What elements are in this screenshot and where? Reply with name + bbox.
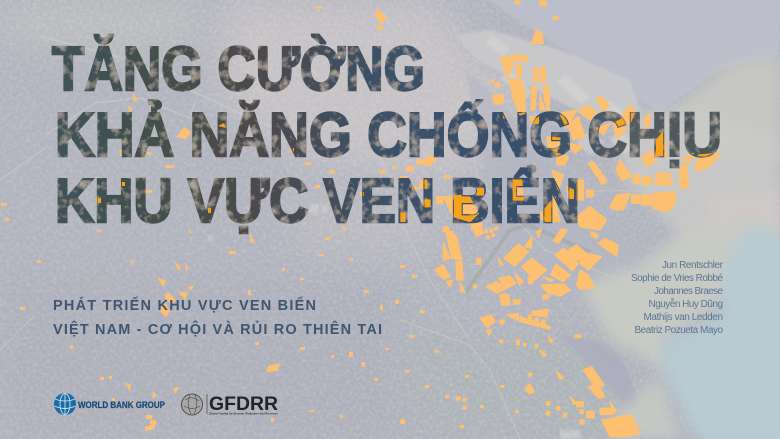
logo: GFDRR: [182, 394, 278, 416]
authors: Johannes Braese: [654, 286, 723, 297]
icon: seal: [182, 394, 202, 415]
logo: GFDRR: Global Facility for Disaster Reduction and Recovery: [209, 412, 278, 416]
saturated parcels seen through the title letters: [98, 113, 713, 222]
built-up land along the river bank: [455, 30, 640, 122]
logo: GFDRR: GFDRR: [209, 394, 278, 415]
authors: Nguyễn Huy Dũng: [648, 297, 723, 310]
title: KHU VỰC VEN BIỂN: [55, 167, 580, 236]
subtitle: VIỆT NAM - CƠ HỘI VÀ RỦI RO THIÊN TAI: [53, 320, 382, 338]
authors: [631, 260, 724, 336]
authors: Mathijs van Ledden: [644, 312, 723, 323]
river and bay water: [490, 0, 780, 110]
subtitle: [53, 296, 382, 338]
wetland and industrial land: [675, 55, 780, 160]
authors: Jun Rentschler: [662, 260, 724, 271]
icon: globe: [54, 393, 76, 415]
logo: World Bank Group: [54, 393, 166, 415]
built-up bright patches: [208, 35, 635, 439]
coastal mud flat: [580, 225, 760, 372]
title: [52, 35, 722, 236]
authors: Sophie de Vries Robbé: [631, 273, 723, 284]
authors: Beatriz Pozueta Mayo: [634, 325, 723, 336]
logo: World Bank Group: WORLD BANK GROUP: [78, 400, 166, 411]
subtitle: PHÁT TRIỂN KHU VỰC VEN BIỂN: [53, 296, 316, 314]
sea: [660, 222, 780, 439]
title: TĂNG CƯỜNG: [52, 35, 425, 104]
